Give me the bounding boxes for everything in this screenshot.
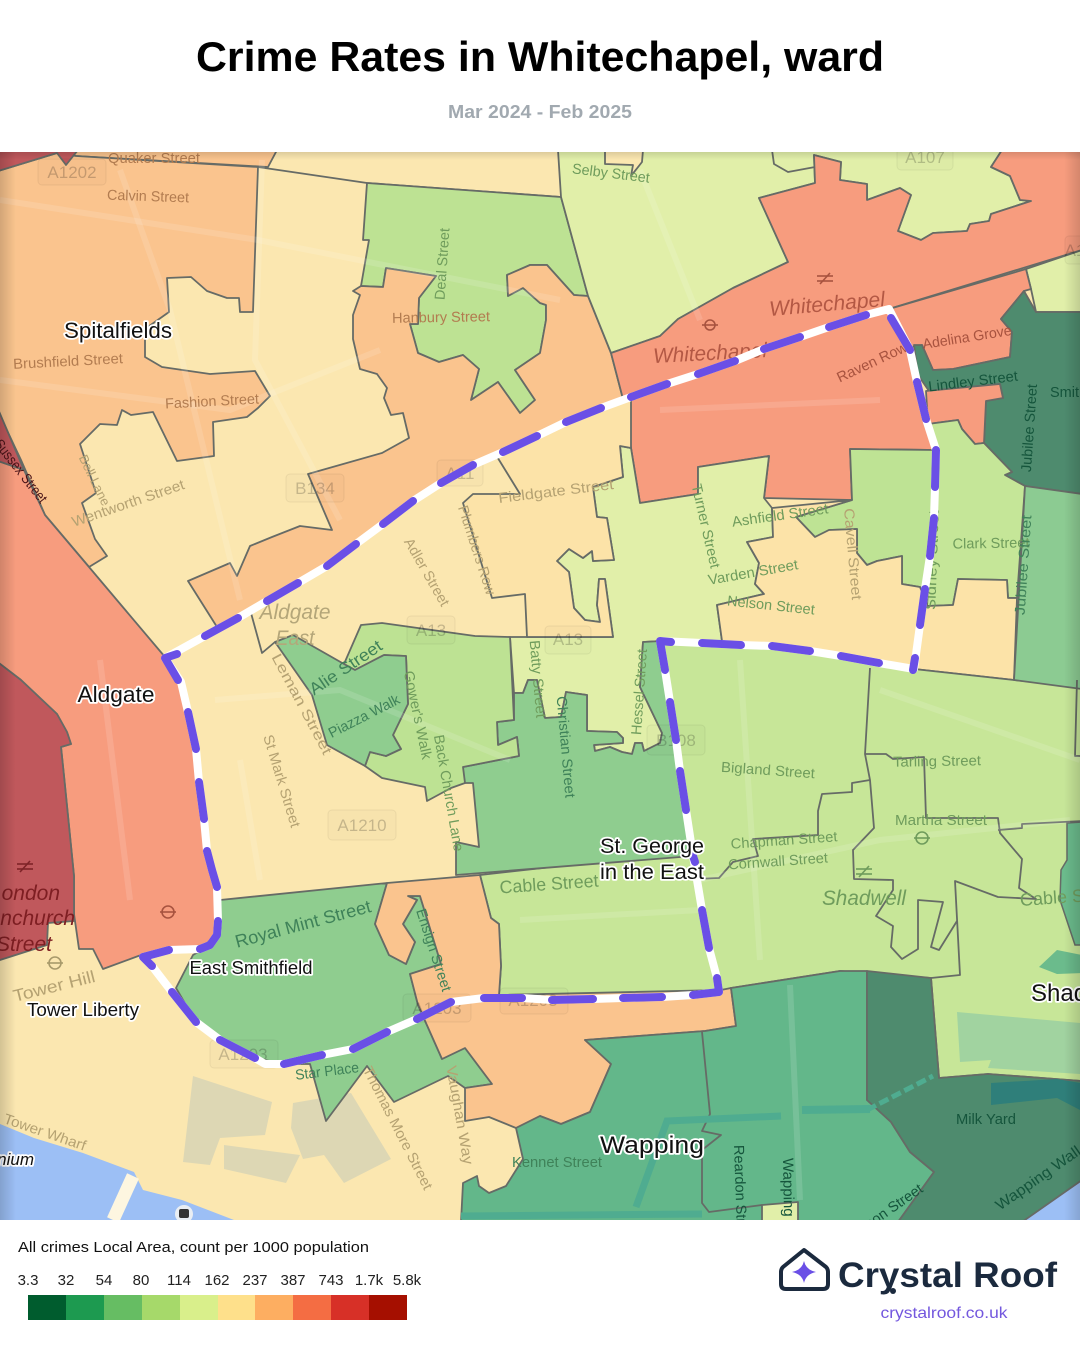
road shields: A1202 [47,163,97,182]
region: pale pocket south [762,1202,798,1224]
street labels: Nelson Street [726,593,815,619]
region: orange Spitalfields body [0,153,270,567]
street labels: Leman Street [268,651,334,758]
road shields: A1203 [412,999,462,1018]
bridge road [113,1176,133,1220]
street labels: Royal Mint Street [233,896,373,952]
street labels: Varden Street [707,557,799,589]
street labels: Tower Hill [11,967,97,1006]
area labels with halo: Spitalfields [64,318,172,343]
region: green Royal Mint [176,883,492,1121]
region: mid green far-right strip [1060,822,1080,945]
dock water, dark [991,1079,1080,1110]
street labels: Turner Street [688,483,722,570]
street labels: Ashfield Street [731,501,829,531]
region: dark green Jubilee [914,291,1080,494]
region: orange Ensign Street and Wapping Lane [375,875,736,1128]
legend tick labels: 80 [133,1272,149,1289]
area labels with halo: East Smithfield [190,958,312,978]
legend colour bar [28,1295,407,1320]
street labels: Thomas More Street [359,1064,435,1193]
region: green Piazza Walk [275,635,408,766]
region: salmon Whitechapel south [623,309,936,503]
region: dark green east Wapping [867,971,1080,1222]
region: light green Cavell [798,448,932,588]
street labels: Calvin Street [107,188,189,206]
street labels: Fieldgate Street [498,477,615,507]
street labels: Kennet Street [512,1155,602,1171]
street labels: Star Place [294,1060,360,1084]
street labels: Adler Street [400,536,452,609]
region: pale green Turner Street [510,446,773,754]
street labels: Chapman Street [730,829,838,853]
station labels italic [0,288,907,956]
boundary: northern road line [258,167,561,197]
station labels italic: Shadwell [822,887,907,910]
water: River Thames [0,1124,234,1220]
road shields: A1203 [508,991,558,1010]
subtitle: date range: Mar 2024 - Feb 2025 [448,102,632,122]
station labels italic: Aldgate [258,601,330,624]
logo y descender dot [890,1288,896,1294]
region: pale green north-east corner [1026,250,1080,312]
area labels with halo: Wapping [600,1132,704,1159]
road shields: A1210 [337,816,387,835]
road shields: A13 [553,630,583,649]
legend tick labels: 114 [167,1272,191,1289]
road shields [38,146,1080,1068]
area labels with halo: St. George [600,835,704,858]
region: dark red top-left [0,152,78,172]
region: orange top strip [75,152,277,168]
docks hardstanding [183,1076,391,1183]
legend tick labels: 54 [96,1272,112,1289]
logo: Crystal Roof [781,1250,1057,1322]
legend tick labels [18,1272,422,1289]
road shields: A13 [416,621,446,640]
region: light green Shadwell [480,641,1080,1081]
street labels: Fashion Street [165,392,259,412]
title: Crime Rates in Whitechapel, ward [196,33,884,80]
station labels italic: Whitechapel [653,339,769,368]
street labels: Plumbers Row [454,504,498,597]
street labels: Back Church Lane [430,734,466,853]
region: salmon Lindley south [926,384,1003,444]
area labels with halo: in the East [600,861,704,884]
legend tick labels: 237 [242,1272,268,1289]
street labels: Martha Street [895,813,987,829]
region: dark red Sussex Street wedge [0,402,24,470]
icon: boat pier [175,1205,193,1223]
street labels: Tarling Street [893,753,981,771]
map edge shadows [0,152,1080,1220]
region: salmon Whitechapel north [611,150,1080,399]
region: dark red Tower Gateway [0,660,74,960]
region: mid green right patch [1039,950,1080,974]
street labels: Cinnamon Street [828,1181,926,1257]
street labels: Tower Wharf [1,1111,89,1155]
area labels with halo: Tower Liberty [27,1000,139,1020]
street labels: Gower's Walk [400,670,434,762]
street labels: Wentworth Street [70,477,187,531]
region: yellow Cavell south [717,500,1017,680]
street labels: Reardon Street [730,1145,749,1244]
station labels italic: Whitechapel [768,288,887,321]
website url: crystalroof.co.uk [880,1305,1009,1322]
region: pale green north [558,150,1031,353]
street labels: Jubilee Street [1019,384,1041,473]
street labels: Christian Street [553,696,577,799]
street labels: Bigland Street [720,760,815,782]
icon: house with star [781,1250,828,1289]
street labels: Alie Street [306,636,386,699]
legend tick labels: 1.7k [355,1272,384,1289]
region: small yellow pocket north [605,150,643,176]
street labels: Sidney Street [923,510,943,610]
street labels: Batty Street [526,640,548,719]
street labels: Vaughan Way [442,1065,476,1167]
area labels with halo: Aldgate [78,682,154,707]
region: light green Clark Street [927,420,1025,606]
legend tick labels: 743 [318,1272,344,1289]
region: salmon Adelina Grove [889,269,1031,370]
ward boundary: purple dashes [143,315,936,1064]
street labels: Clark Street [952,535,1030,553]
street labels: Cavell Street [840,508,864,601]
road shields: A1203 [218,1045,268,1064]
street labels: Adelina Grove [921,323,1013,353]
road shields: B134 [295,479,335,498]
street labels: Brushfield Street [13,351,123,373]
region: green Wapping [461,971,934,1222]
road shields: A11 [446,464,474,483]
street labels: Bell Lane [76,452,113,508]
legend title: All crimes Local Area, count per 1000 population [18,1239,369,1256]
road shields: B108 [656,731,696,750]
street labels: Deal Street [433,228,453,301]
region: light green Deal Street [361,183,588,413]
street labels: Cornwall Street [728,851,829,873]
region: orange Hanbury [188,265,623,627]
street labels: Wapping Wall [992,1143,1080,1214]
wordmark: Crystal Roof [838,1256,1057,1295]
street labels: Hanbury Street [392,309,490,327]
road shields: A107 [905,148,945,167]
transport icons [17,273,930,969]
street labels: Wapping Lane [779,1158,798,1254]
street labels: Lindley Street [927,369,1019,395]
legend tick labels: 5.8k [393,1272,422,1289]
street labels: Milk Yard [956,1112,1016,1128]
street labels: St Mark Street [259,733,303,830]
street labels: Hessel Street [629,649,651,736]
legend tick labels: 387 [280,1272,306,1289]
street labels: Selby Street [571,161,651,187]
street labels: Piazza Walk [326,692,403,742]
region: salmon Aldgate [0,460,218,969]
legend tick labels: 162 [204,1272,230,1289]
region: light green Gower's Walk [344,623,519,801]
park: green patch [957,1012,1080,1074]
region: yellow Fieldgate [463,397,631,637]
water: river east [1026,1182,1080,1220]
region: mid green far east [1014,486,1080,689]
area labels with halo [0,318,1080,1169]
map base: yellow crime band [0,152,1080,1220]
street labels: Raven Row [835,339,911,386]
boundary lines inside regions [251,150,1080,1212]
street labels: Ensign Street [412,907,454,994]
street labels: Quaker Street [108,151,200,167]
canals and water features [461,1076,933,1216]
station labels italic: East [276,627,316,650]
region: green Christian Street [456,641,693,875]
faint street network [0,160,1080,1200]
legend tick labels: 3.3 [18,1272,38,1289]
street labels: Jubilee Street [1013,515,1035,616]
legend tick labels: 32 [58,1272,74,1289]
legend [18,1239,422,1320]
ward boundary: white casing [143,309,936,1064]
street labels: Cable Street [499,871,599,897]
